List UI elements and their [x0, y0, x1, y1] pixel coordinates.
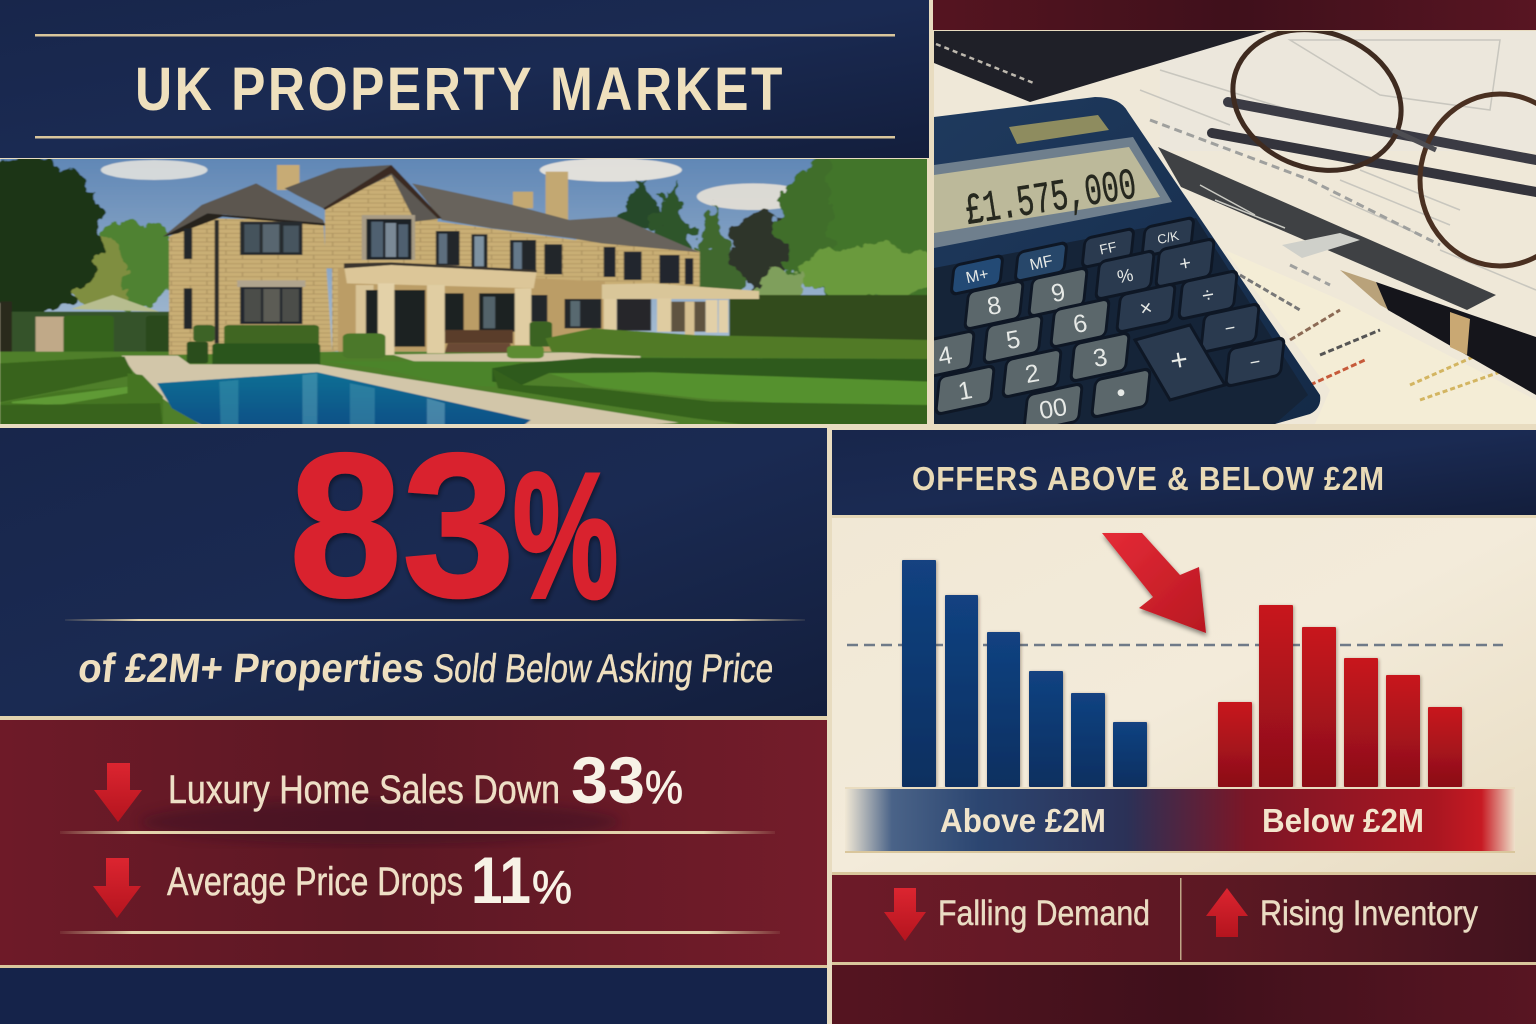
key labels: 00 — [1037, 393, 1069, 425]
calculator body — [934, 97, 1320, 424]
panel: title banner — [0, 0, 929, 158]
photo: calculator and paperwork — [934, 31, 1536, 424]
key labels: 8 — [985, 291, 1003, 321]
sales stat: % — [645, 761, 683, 813]
terrace and shrubs — [391, 352, 640, 362]
big 83 percent figure: 83 — [289, 411, 515, 640]
divider: left panels — [0, 716, 827, 720]
sales stat: 33 — [571, 743, 645, 817]
roofs — [285, 165, 442, 222]
hedge right — [729, 295, 931, 342]
notebook — [934, 30, 1270, 102]
icon: down arrow sales — [94, 763, 142, 822]
panel: bar chart — [832, 518, 1536, 872]
key labels: MF — [1028, 253, 1055, 274]
icon: down arrow demand — [884, 888, 926, 941]
big 83 percent figure — [289, 411, 618, 640]
key labels: % — [1116, 265, 1135, 287]
legend band: Above £2M — [940, 802, 1106, 839]
price stat: Average Price Drops — [167, 860, 463, 904]
bars: below 2M — [1218, 605, 1462, 787]
left garden — [10, 310, 170, 352]
key labels: FF — [1098, 238, 1118, 258]
panel: chart header — [832, 430, 1536, 518]
pen — [1340, 270, 1536, 395]
calculator display readout: £1.575,000 — [962, 162, 1140, 238]
photo: luxury house — [0, 150, 949, 432]
porch — [344, 262, 537, 288]
lawn hedges — [414, 360, 494, 362]
panel: top-right maroon strip — [933, 0, 1536, 30]
key labels: + — [1168, 343, 1191, 378]
key labels: × — [1138, 296, 1154, 321]
key labels: C/K — [1156, 228, 1181, 247]
falling demand label: Falling Demand — [938, 894, 1150, 933]
statistic caption: of £2M+ Properties — [76, 645, 427, 691]
divider: chart footer — [832, 872, 1536, 875]
key labels: 2 — [1023, 359, 1041, 389]
icon: down arrow price — [93, 858, 141, 918]
sales stat: Luxury Home Sales Down — [168, 768, 560, 812]
price stat: % — [532, 861, 572, 913]
chimneys — [277, 165, 299, 190]
key labels: M+ — [964, 266, 990, 287]
key labels: 9 — [1049, 278, 1067, 308]
panel: bottom-left navy strip — [0, 968, 827, 1024]
house walls — [169, 218, 332, 355]
papers — [934, 31, 1536, 424]
key labels: 3 — [1091, 343, 1109, 373]
document table lines — [1150, 120, 1440, 285]
key labels: + — [1178, 252, 1193, 276]
key labels: 1 — [956, 376, 974, 406]
key labels: 6 — [1071, 309, 1089, 339]
key labels: − — [1223, 317, 1237, 339]
key labels: ÷ — [1200, 283, 1216, 308]
key labels — [936, 228, 1262, 425]
panel: bottom-right maroon strip — [832, 965, 1536, 1024]
panel: price falls — [0, 720, 827, 965]
big 83 percent figure: % — [513, 436, 618, 635]
legend band — [845, 787, 1515, 853]
icon: up arrow inventory — [1206, 888, 1248, 937]
lawn ground — [0, 352, 930, 432]
price stat: 11 — [471, 843, 531, 917]
key labels: • — [1114, 378, 1128, 408]
price stat — [167, 843, 572, 917]
statistic caption — [76, 645, 776, 691]
panel: headline statistic — [0, 411, 827, 716]
lower ledger — [1225, 250, 1536, 424]
bars: above 2M — [902, 560, 1147, 787]
key labels: − — [1248, 351, 1262, 373]
legend band: Below £2M — [1262, 802, 1424, 839]
dark banded strip — [1158, 147, 1496, 310]
title: UK PROPERTY MARKET — [135, 55, 785, 123]
windows — [240, 222, 302, 255]
keys — [934, 267, 1152, 424]
path and pool surround — [122, 356, 679, 430]
chart title: OFFERS ABOVE & BELOW £2M — [912, 460, 1385, 497]
arrow: downward trend — [1102, 533, 1206, 633]
sales stat — [168, 743, 683, 817]
key labels: 4 — [936, 341, 955, 371]
key labels: 5 — [1004, 325, 1022, 355]
rising inventory label: Rising Inventory — [1260, 894, 1478, 933]
statistic caption: Sold Below Asking Price — [431, 647, 776, 691]
panel: demand and inventory — [832, 875, 1536, 962]
glasses — [1212, 7, 1536, 266]
trees group — [0, 150, 949, 313]
